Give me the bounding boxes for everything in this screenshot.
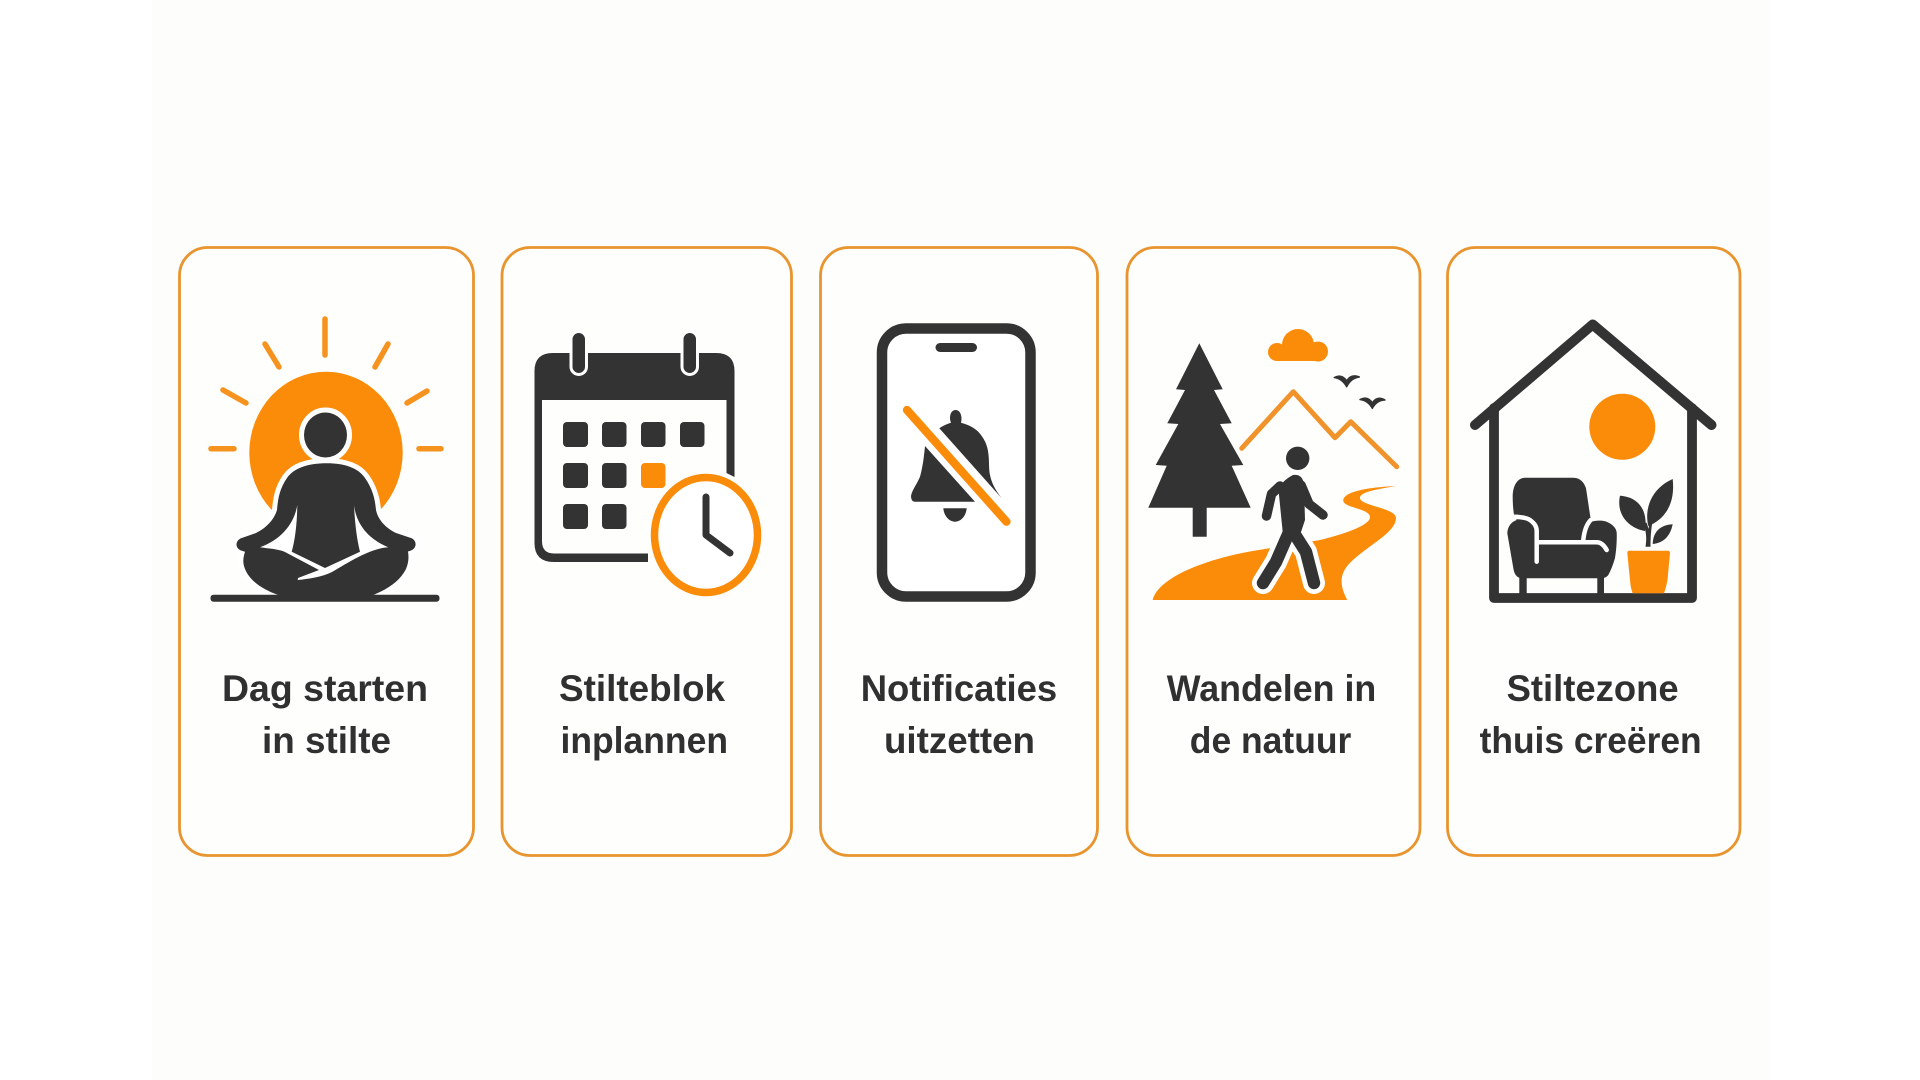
card outline	[820, 248, 1098, 856]
label: inplannen	[560, 720, 728, 761]
pine tree	[1148, 343, 1251, 537]
walker	[1263, 447, 1323, 583]
ground line	[210, 595, 440, 602]
icon: quiet zone at home	[1475, 324, 1712, 598]
icon: calendar with clock	[534, 333, 758, 592]
label	[1167, 668, 1376, 761]
orange sun	[1589, 394, 1655, 460]
arm gaps and crossed legs	[260, 505, 388, 580]
calendar day squares	[563, 422, 704, 529]
chair back and seat	[1507, 478, 1617, 578]
clock	[654, 478, 758, 592]
big leaf	[1647, 479, 1673, 526]
plant stem	[1643, 519, 1653, 547]
label: Dag starten	[222, 668, 428, 709]
plant pot	[1627, 551, 1670, 593]
phone speaker	[936, 343, 977, 352]
armchair	[1507, 478, 1617, 596]
walker legs outline	[1263, 530, 1314, 583]
label	[861, 668, 1057, 761]
bell	[911, 410, 1002, 522]
card outline	[180, 248, 474, 856]
label	[1480, 668, 1702, 761]
icon: meditating person with sun	[210, 319, 441, 602]
panel: Wandelen in de natuur	[1127, 248, 1420, 856]
sun disc	[249, 372, 403, 534]
phone frame	[882, 328, 1030, 596]
body	[236, 463, 416, 595]
birds	[1334, 376, 1385, 408]
label: de natuur	[1190, 720, 1351, 761]
panel: Dag starten in stilte	[180, 248, 474, 856]
mountains	[1242, 392, 1397, 467]
chair legs	[1519, 574, 1604, 596]
panel: Stiltezone thuis creëren	[1448, 248, 1740, 856]
bell upper part	[939, 410, 1002, 498]
cloud	[1268, 329, 1328, 362]
calendar rings	[572, 333, 696, 373]
icon: nature walk	[1148, 329, 1397, 600]
head	[304, 412, 347, 458]
label: uitzetten	[884, 720, 1035, 761]
walker torso	[1279, 475, 1305, 535]
sun rays	[211, 319, 441, 449]
label: Stilteblok	[559, 668, 725, 709]
small leaf	[1653, 524, 1673, 544]
card outline	[1448, 248, 1740, 856]
label: Stiltezone	[1507, 668, 1679, 709]
bell lower part	[911, 446, 975, 502]
plant	[1619, 479, 1673, 547]
panel: Notificaties uitzetten	[820, 248, 1098, 856]
label	[559, 668, 728, 761]
calendar body	[534, 353, 734, 562]
label: thuis creëren	[1480, 720, 1702, 761]
walker head	[1286, 447, 1309, 470]
chair cushion lines	[1515, 517, 1607, 562]
orange slash	[907, 410, 1006, 522]
card outline	[502, 248, 792, 856]
label	[222, 668, 428, 761]
label: Wandelen in	[1167, 668, 1376, 709]
house outline	[1475, 324, 1712, 598]
label: in stilte	[262, 720, 391, 761]
highlighted day	[641, 463, 666, 488]
panel: Stilteblok inplannen	[502, 248, 792, 856]
label: Notificaties	[861, 668, 1057, 709]
icon: phone with muted bell	[882, 328, 1030, 596]
walker limbs	[1263, 485, 1323, 583]
card outline	[1127, 248, 1420, 856]
bell clapper	[943, 508, 967, 522]
left leaf	[1619, 496, 1646, 531]
winding path	[1153, 486, 1397, 600]
